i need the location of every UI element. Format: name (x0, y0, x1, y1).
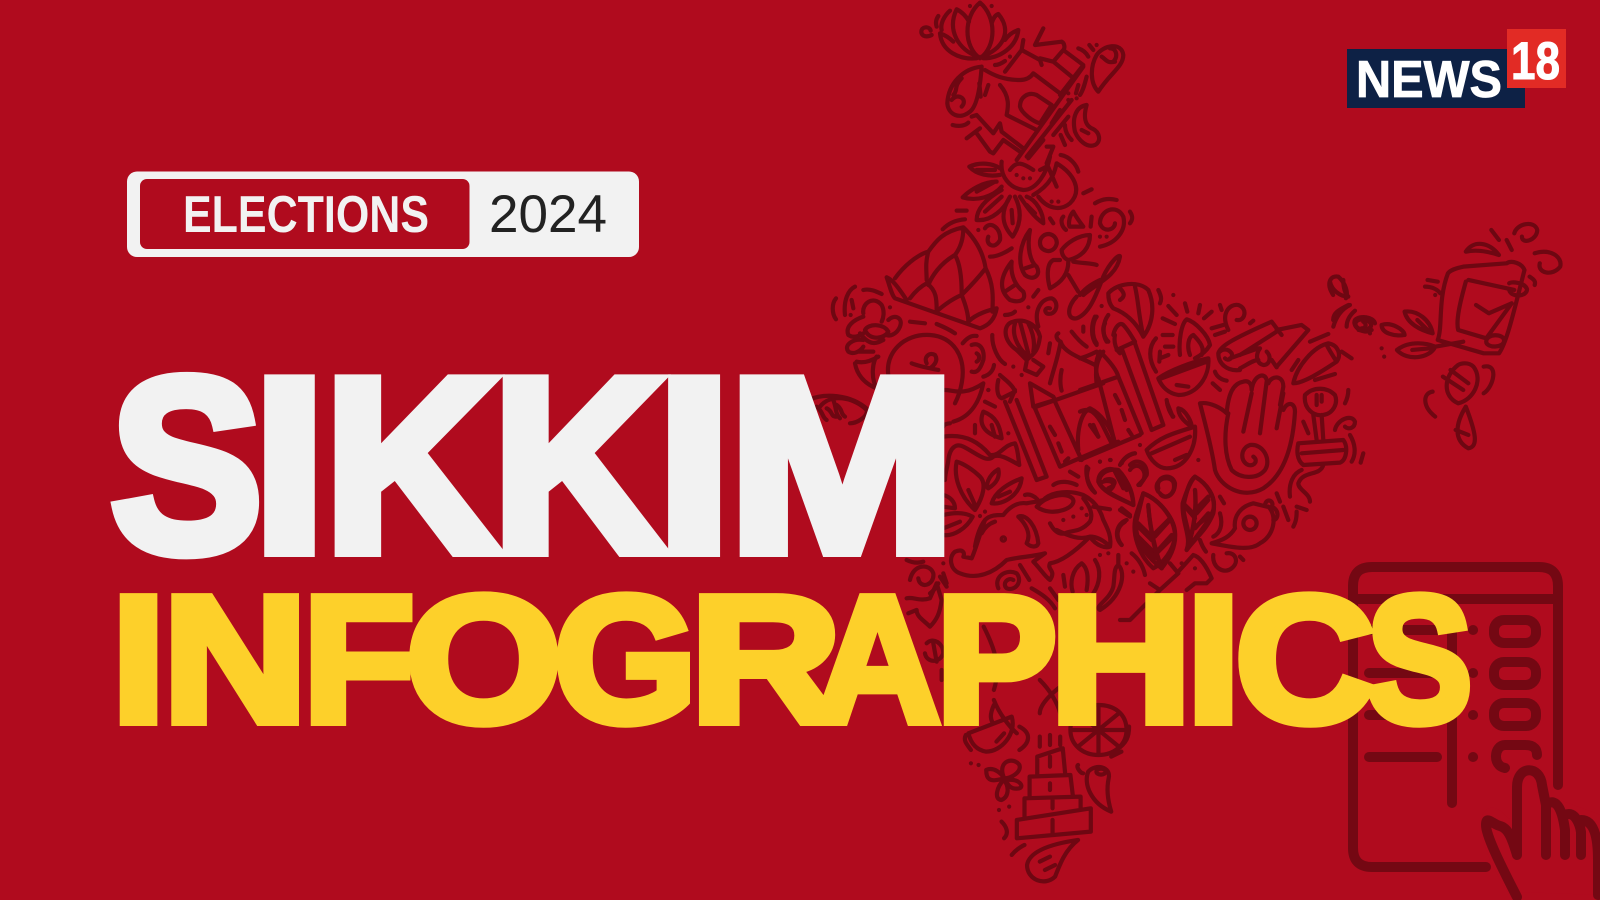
icon: hill building (967, 28, 1083, 153)
icon: second minaret and Taj right (1080, 352, 1142, 460)
icon: diya lamp (1150, 303, 1253, 395)
icon: counter behind P (984, 627, 1065, 733)
badge background (127, 172, 639, 257)
icon: cinnamon rolls (1213, 322, 1308, 390)
title: INFOGRAPHICS: C (1235, 560, 1375, 760)
icon: drop (1077, 765, 1111, 812)
icon: swirls (1050, 189, 1132, 247)
icon: shell behind letter (820, 398, 887, 492)
text: 2024: 2024 (489, 185, 607, 244)
doodles: north-east (1329, 224, 1561, 448)
icon: eastern corridor swirl (1330, 280, 1375, 333)
text: ELECTIONS: ELECTIONS (183, 186, 429, 244)
icon: chili (1292, 334, 1352, 383)
doodles: west side behind letters (808, 396, 947, 680)
icon: fish (1200, 493, 1297, 571)
icon: bowl (965, 705, 1028, 752)
title: INFOGRAPHICS: G (554, 560, 697, 760)
doodles: north, lotus and Kashmir (921, 3, 1132, 247)
title: INFOGRAPHICS: N (163, 560, 308, 760)
doodles: centre, elephant and leaves (930, 453, 1214, 620)
title: INFOGRAPHICS: S (1367, 560, 1472, 760)
icon: flower (943, 164, 1043, 237)
title: INFOGRAPHICS: H (1050, 560, 1192, 760)
icon: Taj left (1030, 315, 1120, 467)
icon: citrus wheel (1070, 705, 1129, 757)
icon: tablet frame (1438, 262, 1527, 353)
title: INFOGRAPHICS: A (814, 560, 940, 760)
edition badge (127, 172, 639, 257)
icon: spiral and arcs (997, 553, 1145, 608)
title: INFOGRAPHICS: P (936, 560, 1057, 760)
title: SIKKIM: M (728, 326, 956, 604)
icon: central leaves (1118, 477, 1214, 568)
title: SIKKIM: K (492, 326, 665, 604)
pointing hand (1486, 770, 1600, 900)
icon: elephant (951, 472, 1110, 580)
icon: NE leaves (1382, 311, 1463, 357)
icon: lotus temple (887, 227, 997, 328)
icon: urn (1290, 389, 1363, 510)
icon: NE bowl and drop (1425, 363, 1493, 448)
icon: swirls top right (1425, 224, 1561, 295)
icon: west flower (833, 287, 901, 388)
title: SIKKIM: I (253, 326, 326, 604)
logo: News18 (1347, 29, 1566, 109)
icon: lotus (921, 3, 1018, 59)
badge red label (140, 179, 470, 249)
icon: three leaves (943, 462, 1022, 535)
icon: lower bowl (1140, 400, 1198, 468)
icon: teapot (888, 322, 1022, 427)
title: INFOGRAPHICS: I (1187, 560, 1240, 760)
ballot dots (1468, 630, 1478, 757)
icon: voting phone and pointing hand (1353, 567, 1600, 900)
icon: citrus leaf and swirls (1087, 453, 1175, 505)
phone header and column (1353, 599, 1558, 803)
icon: veena tool (1120, 555, 1212, 620)
icon: shell top (1080, 280, 1173, 417)
icon: citrus leaf (1086, 460, 1133, 545)
icon: gopuram tower (1017, 735, 1091, 838)
logo red block (1507, 29, 1566, 88)
illustration: doodle map of India (808, 3, 1561, 881)
icon: snake and leaf (943, 390, 1019, 480)
icon: chilies (1072, 553, 1122, 610)
phone frame (1353, 567, 1558, 867)
icon: strawberry and swirl (907, 560, 947, 680)
doodles: west, lotus temple and Taj (820, 225, 1120, 492)
icon: open palm (1200, 376, 1295, 493)
icon: left leaf (947, 57, 1010, 126)
icon: right leaves (1061, 45, 1123, 172)
icon: shell under M (808, 396, 893, 500)
logo text: 18: 18 (1511, 32, 1560, 91)
icon: corridor drop and swirl (1329, 276, 1371, 330)
icon: bird (1040, 234, 1120, 318)
doodles: east-central, lamp and hand (1080, 280, 1375, 571)
logo navy block (1347, 49, 1525, 108)
icon: paintbrush (997, 375, 1047, 480)
title: SIKKIM: K (324, 326, 499, 604)
icon: balloon (1005, 290, 1056, 375)
icon: south flower (971, 761, 1021, 800)
ballot buttons (1494, 620, 1537, 768)
title: INFOGRAPHICS: F (303, 560, 415, 760)
icon: paintbrush two (1113, 324, 1163, 430)
icon: veined leaves (1136, 477, 1214, 568)
icon: mango bottom (999, 807, 1078, 881)
doodles: south peninsula (965, 627, 1129, 881)
title: SIKKIM: I (657, 326, 732, 604)
title: INFOGRAPHICS: I (112, 560, 166, 760)
icon: teardrops and swirl (978, 225, 1038, 301)
logo text: NEWS: NEWS (1356, 51, 1502, 109)
title: INFOGRAPHICS: R (690, 560, 841, 760)
icon: flute and bowl (1001, 67, 1083, 208)
title: SIKKIM: S (110, 326, 262, 604)
title: INFOGRAPHICS: O (406, 560, 562, 760)
icon: left arcs (930, 563, 947, 593)
icon: small swirls (1122, 453, 1174, 497)
ballot lines (1369, 630, 1437, 757)
